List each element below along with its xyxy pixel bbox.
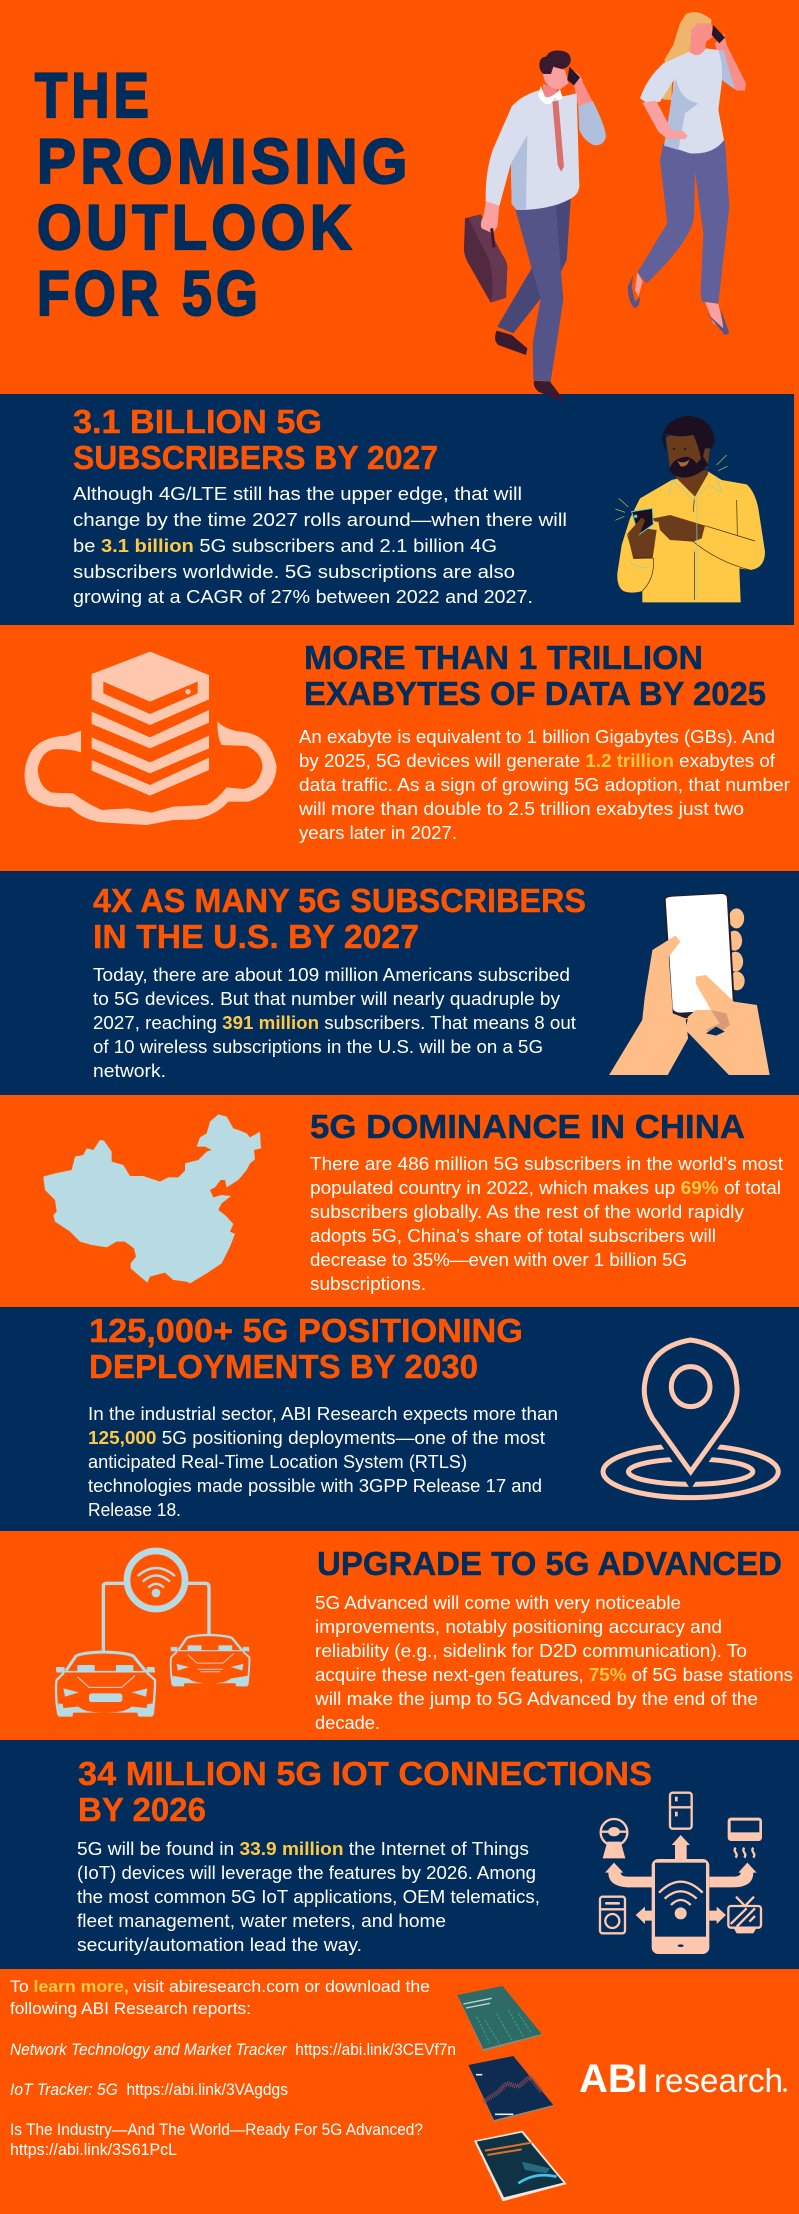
- section 7 body text: fleet management, water meters, and home: [77, 1910, 446, 1931]
- report cover: 5G Advanced: [474, 2131, 567, 2201]
- section 1 heading: [73, 403, 438, 476]
- section 3 heading: IN THE U.S. BY 2027: [93, 918, 419, 955]
- report cover: IoT tracker 5G: [468, 2056, 554, 2122]
- icon: small car: [171, 1635, 249, 1686]
- footer text: learn more links: [10, 1978, 456, 2159]
- section 1 body text: subscribers worldwide. 5G subscriptions are also: [73, 561, 515, 582]
- section 5 body text: In the industrial sector, ABI Research expects more than: [88, 1403, 558, 1424]
- section 7 body text: [77, 1838, 540, 1955]
- logo: ABI Research: research: [654, 2062, 783, 2099]
- section 6 body text: will make the jump to 5G Advanced by the end of the: [314, 1688, 758, 1709]
- logo: ABI Research: ABI: [579, 2057, 648, 2101]
- section 7 body text: the most common 5G IoT applications, OEM telematics,: [77, 1886, 540, 1907]
- section 1 body text: be 3.1 billion 5G subscribers and 2.1 billion 4G: [73, 535, 497, 556]
- report covers: [457, 1986, 567, 2201]
- icon: large car: [56, 1652, 155, 1717]
- section 5 body text: 125,000 5G positioning deployments—one of the most: [88, 1427, 545, 1448]
- section 4 body text: decrease to 35%—even with over 1 billion 5G: [310, 1249, 687, 1270]
- illustration: hands holding a smartphone: [609, 893, 770, 1075]
- section 6 body text: [314, 1592, 793, 1733]
- section 3 heading: 4X AS MANY 5G SUBSCRIBERS: [93, 882, 586, 919]
- illustration: man on the phone with briefcase: [464, 50, 606, 402]
- icon: data server in a cloud: [25, 652, 277, 825]
- section 6 body text: decade.: [315, 1712, 380, 1733]
- section 4 body text: subscriptions.: [310, 1273, 426, 1294]
- footer text: learn more links: To learn more, visit abiresearch.com or download the: [10, 1978, 430, 1996]
- section 7 body text: (IoT) devices will leverage the features by 2026. Among: [77, 1862, 536, 1883]
- footer text: learn more links: https://abi.link/3S61PcL: [10, 2141, 177, 2159]
- section 5 heading: 125,000+ 5G POSITIONING: [89, 1312, 523, 1349]
- section 3 body text: [93, 964, 576, 1081]
- illustration: man using smartphone: [615, 416, 765, 602]
- section 5 body text: Release 18.: [88, 1499, 181, 1520]
- section 6 body text: reliability (e.g., sidelink for D2D communication). To: [315, 1640, 747, 1661]
- logo: ABI Research: [579, 2057, 787, 2101]
- panel: subscribers background: [0, 394, 794, 625]
- section 4 body text: adopts 5G, China's share of total subscribers will: [310, 1225, 716, 1246]
- title: [35, 61, 412, 329]
- section 4 heading: 5G DOMINANCE IN CHINA: [310, 1108, 745, 1145]
- section 1 heading: 3.1 BILLION 5G: [73, 403, 322, 440]
- icon: IoT smartphone hub: [600, 1793, 762, 1954]
- section 4 body text: There are 486 million 5G subscribers in the world's most: [310, 1153, 783, 1174]
- section 1 heading: SUBSCRIBERS BY 2027: [73, 439, 438, 476]
- panel: IoT background: [0, 1740, 799, 1969]
- icon: connected cars with wifi: [56, 1551, 249, 1717]
- section 2 body text: years later in 2027.: [299, 822, 457, 843]
- title: THE: [35, 61, 153, 131]
- illustration: woman on the phone: [628, 12, 746, 335]
- section 7 body text: security/automation lead the way.: [77, 1934, 362, 1955]
- section 2 heading: MORE THAN 1 TRILLION: [304, 639, 703, 676]
- section 7 heading: 34 MILLION 5G IOT CONNECTIONS: [78, 1755, 652, 1792]
- section 7 body text: 5G will be found in 33.9 million the Internet of Things: [77, 1838, 529, 1859]
- panel: positioning background: [0, 1307, 799, 1531]
- section 5 heading: [89, 1312, 523, 1385]
- title: OUTLOOK: [37, 193, 356, 263]
- section 2 body text: [298, 726, 790, 843]
- section 5 heading: DEPLOYMENTS BY 2030: [89, 1348, 478, 1385]
- section 2 body text: by 2025, 5G devices will generate 1.2 trillion exabytes of: [299, 750, 776, 771]
- section 1 body text: Although 4G/LTE still has the upper edge, that will: [73, 483, 522, 504]
- section 5 body text: [88, 1403, 558, 1520]
- section 7 heading: BY 2026: [78, 1791, 206, 1828]
- section 3 body text: network.: [93, 1060, 166, 1081]
- section 3 body text: 2027, reaching 391 million subscribers. That means 8 out: [93, 1012, 576, 1033]
- section 2 heading: EXABYTES OF DATA BY 2025: [304, 675, 766, 712]
- section 4 body text: subscribers globally. As the rest of the world rapidly: [310, 1201, 745, 1222]
- section 1 body text: [73, 483, 567, 607]
- section 6 body text: improvements, notably positioning accuracy and: [315, 1616, 722, 1637]
- section 1 body text: growing at a CAGR of 27% between 2022 and 2027.: [73, 586, 533, 607]
- section 6 body text: 5G Advanced will come with very noticeable: [315, 1592, 681, 1613]
- section 2 body text: An exabyte is equivalent to 1 billion Gigabytes (GBs). And: [299, 726, 775, 747]
- section 3 body text: to 5G devices. But that number will nearly quadruple by: [93, 988, 561, 1009]
- section 3 body text: of 10 wireless subscriptions in the U.S. will be on a 5G: [93, 1036, 543, 1057]
- footer text: learn more links: following ABI Research reports:: [10, 2000, 251, 2018]
- section 3 body text: Today, there are about 109 million Americans subscribed: [93, 964, 570, 985]
- footer text: learn more links: Is The Industry—And The World—Ready For 5G Advanced?: [10, 2121, 423, 2139]
- report cover: network technology tracker: [457, 1986, 543, 2051]
- panel: US subscribers background: [0, 871, 799, 1095]
- map: China: [43, 1114, 261, 1283]
- footer text: learn more links: Network Technology and Market Tracker https://abi.link/3CEVf7n: [10, 2041, 456, 2059]
- icon: location pin: [603, 1340, 778, 1498]
- section 2 body text: will more than double to 2.5 trillion exabytes just two: [298, 798, 744, 819]
- section 6 body text: acquire these next-gen features, 75% of 5G base stations: [315, 1664, 793, 1685]
- section 2 body text: data traffic. As a sign of growing 5G adoption, that number: [299, 774, 790, 795]
- section 6 heading: UPGRADE TO 5G ADVANCED: [317, 1545, 782, 1582]
- section 5 body text: anticipated Real-Time Location System (RTLS): [88, 1451, 467, 1472]
- section 7 heading: [78, 1755, 652, 1828]
- section 1 body text: change by the time 2027 rolls around—when there will: [73, 509, 567, 530]
- section 4 body text: [310, 1153, 783, 1294]
- title: FOR 5G: [37, 259, 262, 329]
- title: PROMISING: [37, 127, 412, 197]
- section 5 body text: technologies made possible with 3GPP Release 17 and: [88, 1475, 542, 1496]
- section 3 heading: [93, 882, 586, 955]
- section 2 heading: [304, 639, 766, 712]
- section 4 body text: populated country in 2022, which makes up 69% of total: [310, 1177, 781, 1198]
- footer text: learn more links: IoT Tracker: 5G https://abi.link/3VAgdgs: [10, 2081, 288, 2099]
